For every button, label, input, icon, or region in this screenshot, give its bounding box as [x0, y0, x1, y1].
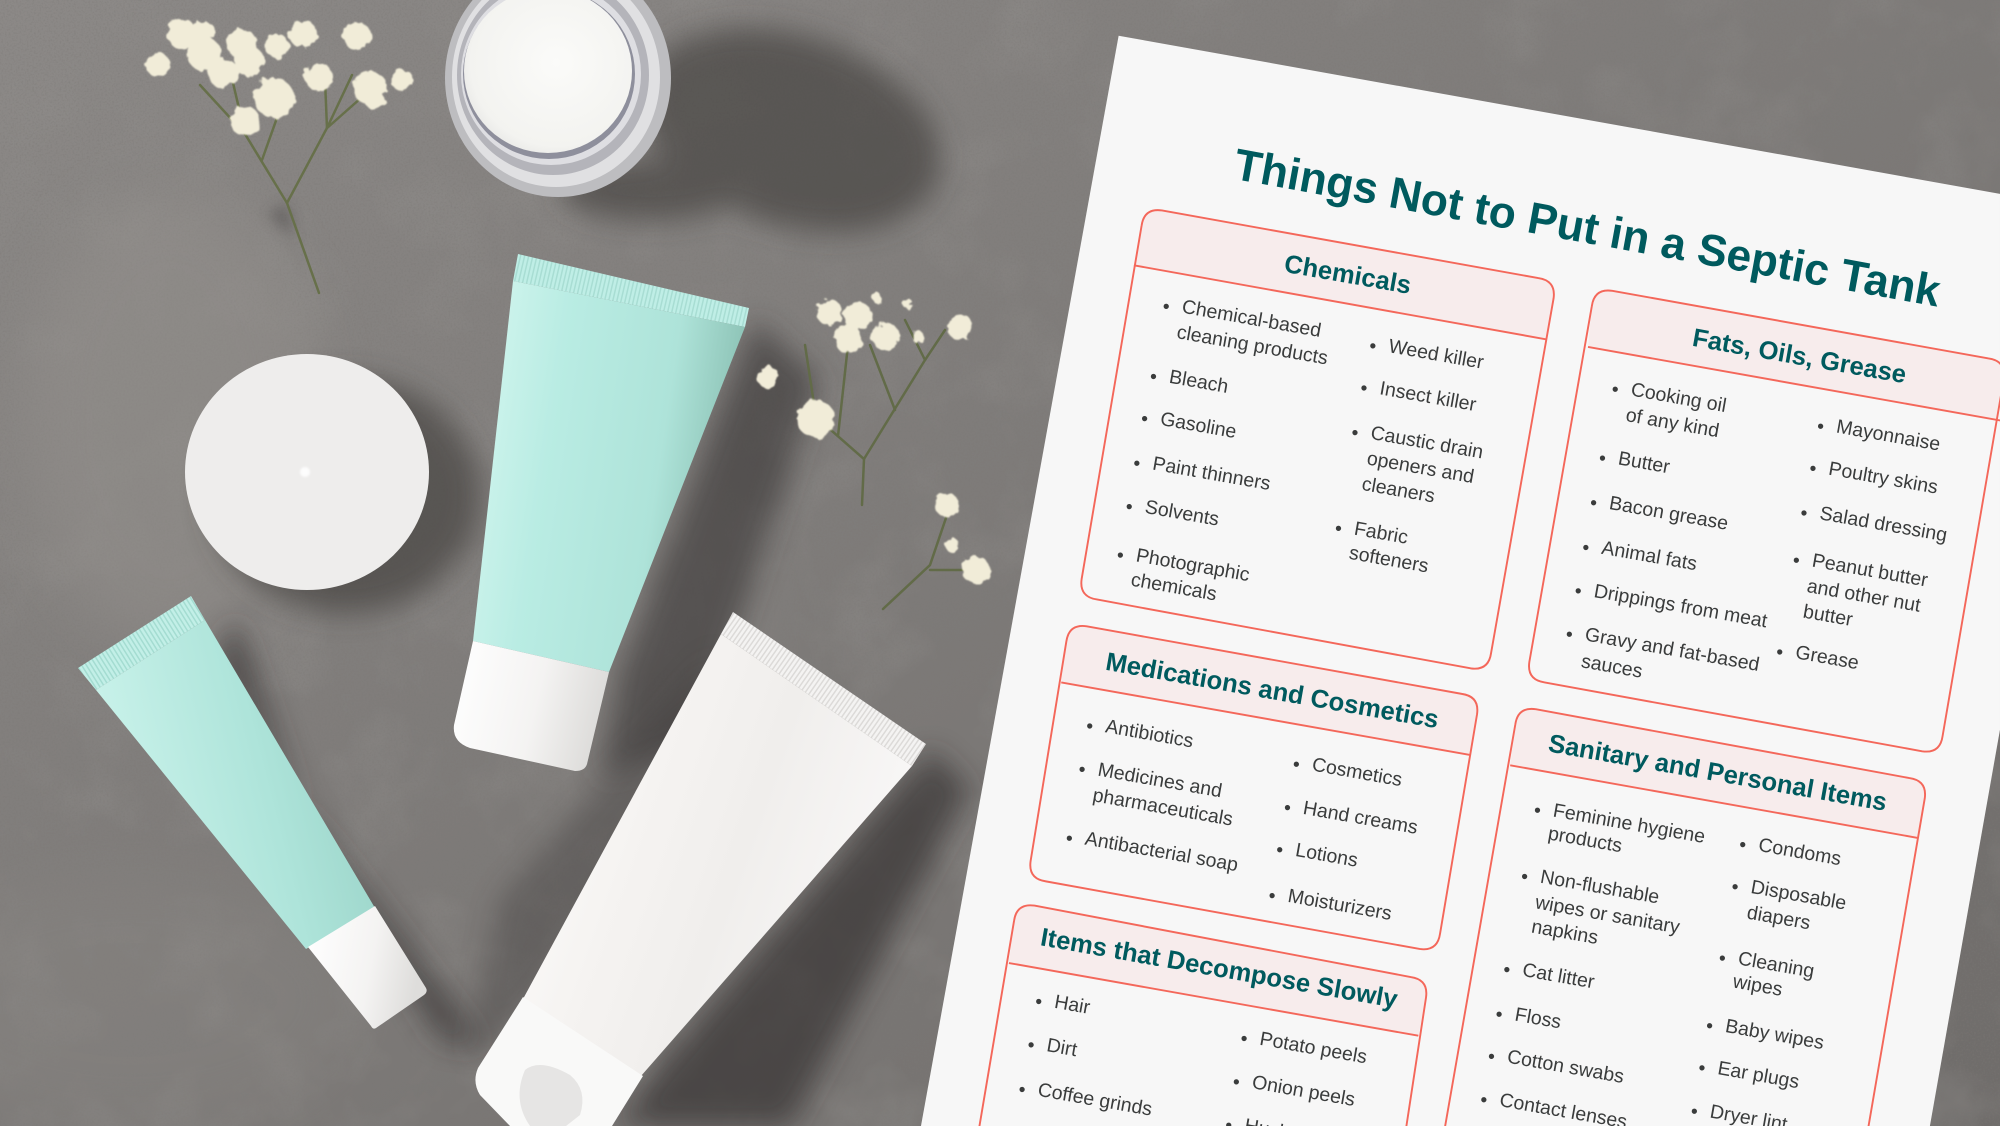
- list: chemicals: softeners: [1347, 542, 1430, 578]
- list: medications and cosmetics: Antibiotics: [1104, 715, 1195, 753]
- list: fats, oils, grease: Drippings from meat: [1592, 580, 1770, 632]
- flower sprig: top left: [146, 19, 413, 293]
- flower sprig: right of tube: [757, 293, 973, 505]
- list: medications and cosmetics: •: [1064, 827, 1075, 850]
- list: items that decompose slowly: •: [1033, 990, 1044, 1013]
- list: items that decompose slowly: •: [1239, 1027, 1249, 1050]
- list: fats, oils, grease: •: [1815, 415, 1826, 438]
- icon: cream jar: [445, 0, 671, 197]
- list: sanitary and personal items: Disposable: [1749, 876, 1848, 915]
- list: chemicals: •: [1115, 544, 1126, 567]
- list: fats, oils, grease: Animal fats: [1600, 537, 1699, 575]
- list: medications and cosmetics: •: [1267, 884, 1278, 907]
- title: Things Not to Put in a Septic Tank: [1230, 140, 1944, 317]
- list: fats, oils, grease: Bacon grease: [1608, 492, 1730, 535]
- list: fats, oils, grease: •: [1588, 491, 1599, 514]
- list: fats, oils, grease: [1564, 375, 1949, 683]
- list: fats, oils, grease: and other nut: [1805, 575, 1923, 617]
- list: chemicals: Photographic: [1134, 544, 1252, 586]
- list: fats, oils, grease: butter: [1801, 601, 1855, 631]
- heading: items that decompose slowly: Items that Decompose Slowly: [1038, 923, 1400, 1014]
- list: fats, oils, grease: Gravy and fat-based: [1583, 624, 1761, 676]
- list: sanitary and personal items: Cotton swabs: [1506, 1046, 1626, 1088]
- list: chemicals: •: [1124, 495, 1135, 518]
- list: sanitary and personal items: Cat litter: [1521, 959, 1597, 993]
- heading: chemicals: Chemicals: [1282, 250, 1413, 300]
- white tube shadow: [620, 750, 970, 1126]
- list: chemicals: cleaners: [1360, 473, 1437, 508]
- list: chemicals: Fabric: [1352, 518, 1410, 549]
- small teal tube shadow: [215, 618, 485, 1047]
- list: sanitary and personal items: products: [1546, 823, 1624, 857]
- list: sanitary and personal items: •: [1697, 1056, 1707, 1079]
- heading: sanitary and personal items: Sanitary and Personal Items: [1546, 730, 1889, 817]
- list: chemicals: cleaning products: [1175, 321, 1330, 370]
- list: fats, oils, grease: Poultry skins: [1827, 458, 1940, 499]
- list: fats, oils, grease: sauces: [1579, 650, 1644, 683]
- icon: white lid: [185, 354, 429, 590]
- list: sanitary and personal items: diapers: [1745, 902, 1812, 934]
- heading: medications and cosmetics: Medications and Cosmetics: [1104, 648, 1441, 734]
- list: chemicals: Chemical-based: [1180, 296, 1323, 342]
- list: medications and cosmetics: Moisturizers: [1286, 885, 1394, 925]
- list: chemicals: •: [1333, 517, 1344, 540]
- list: fats, oils, grease: •: [1573, 579, 1584, 602]
- jar shadow: [560, 0, 967, 268]
- list: sanitary and personal items: Cleaning: [1736, 948, 1816, 983]
- list: fats, oils, grease: Butter: [1616, 448, 1672, 478]
- icon: large teal tube: [454, 254, 749, 771]
- list: fats, oils, grease: •: [1799, 502, 1809, 524]
- list: fats, oils, grease: •: [1610, 378, 1621, 401]
- list: sanitary and personal items: •: [1717, 947, 1728, 970]
- list: sanitary and personal items: Baby wipes: [1724, 1015, 1826, 1054]
- list: fats, oils, grease: •: [1808, 457, 1818, 480]
- list: medications and cosmetics: •: [1274, 838, 1285, 861]
- panel: sanitary and personal items: [1441, 709, 1925, 1126]
- list: medications and cosmetics: [1064, 712, 1420, 928]
- list: chemicals: Gasoline: [1159, 408, 1238, 443]
- panel: fats, oils, grease: [1529, 290, 2000, 752]
- flower sprig: lower: [883, 493, 990, 609]
- list: chemicals: chemicals: [1129, 569, 1219, 605]
- list: chemicals: [1115, 292, 1486, 605]
- list: fats, oils, grease: •: [1597, 447, 1608, 470]
- list: medications and cosmetics: Medicines and: [1096, 759, 1224, 802]
- list: items that decompose slowly: Coffee grinds: [1036, 1079, 1154, 1121]
- list: sanitary and personal items: •: [1689, 1100, 1700, 1123]
- list: sanitary and personal items: •: [1502, 958, 1512, 981]
- icon: small teal tube: [78, 596, 427, 1029]
- large teal tube shadow: [600, 320, 820, 780]
- icon: large white tube: [475, 612, 926, 1126]
- list: fats, oils, grease: Salad dressing: [1818, 502, 1949, 546]
- list: medications and cosmetics: Lotions: [1294, 839, 1360, 872]
- panel: items that decompose slowly: [976, 905, 1426, 1126]
- list: chemicals: •: [1350, 421, 1360, 444]
- list: items that decompose slowly: •: [1017, 1078, 1028, 1101]
- list: chemicals: Caustic drain: [1369, 422, 1485, 463]
- panel: printed sheet: [921, 36, 2000, 1126]
- list: fats, oils, grease: of any kind: [1624, 404, 1721, 442]
- list: sanitary and personal items: •: [1519, 865, 1530, 888]
- list: sanitary and personal items: •: [1738, 833, 1748, 856]
- list: chemicals: Bleach: [1167, 366, 1230, 398]
- list: sanitary and personal items: •: [1494, 1003, 1505, 1026]
- list: chemicals: •: [1368, 334, 1378, 357]
- list: chemicals: Solvents: [1143, 496, 1221, 531]
- list: sanitary and personal items: Non-flushable: [1539, 866, 1661, 908]
- list: chemicals: •: [1161, 295, 1172, 318]
- list: items that decompose slowly: Dirt: [1045, 1034, 1079, 1061]
- list: sanitary and personal items: •: [1704, 1014, 1715, 1037]
- sheet of paper: [921, 36, 2000, 1126]
- list: items that decompose slowly: Hair: [1053, 991, 1092, 1019]
- panel: medications and cosmetics: [1030, 626, 1477, 949]
- list: items that decompose slowly: Onion peels: [1250, 1071, 1357, 1111]
- list: fats, oils, grease: Peanut butter: [1810, 550, 1930, 592]
- list: fats, oils, grease: Cooking oil: [1629, 379, 1728, 417]
- list: chemicals: Weed killer: [1387, 335, 1486, 374]
- list: chemicals: •: [1132, 452, 1142, 475]
- list: sanitary and personal items: Floss: [1513, 1004, 1563, 1033]
- list: fats, oils, grease: Mayonnaise: [1835, 416, 1942, 456]
- list: fats, oils, grease: Grease: [1794, 641, 1861, 674]
- list: medications and cosmetics: Hand creams: [1301, 797, 1420, 839]
- list: sanitary and personal items: [1479, 796, 1848, 1126]
- list: sanitary and personal items: Feminine hygiene: [1551, 800, 1707, 848]
- heading: fats, oils, grease: Fats, Oils, Grease: [1690, 324, 1908, 389]
- list: items that decompose slowly: •: [1231, 1070, 1242, 1093]
- list: chemicals: •: [1359, 377, 1369, 399]
- list: medications and cosmetics: Antibacterial soap: [1083, 828, 1240, 876]
- list: chemicals: •: [1139, 407, 1150, 430]
- list: sanitary and personal items: •: [1532, 799, 1543, 822]
- list: fats, oils, grease: •: [1791, 549, 1802, 572]
- list: chemicals: •: [1148, 365, 1159, 388]
- list: fats, oils, grease: •: [1581, 536, 1591, 559]
- list: items that decompose slowly: [1017, 988, 1369, 1126]
- list: chemicals: openers and: [1365, 448, 1476, 488]
- panel: chemicals: [1081, 210, 1554, 669]
- list: items that decompose slowly: •: [1026, 1033, 1036, 1056]
- list: medications and cosmetics: pharmaceuticals: [1091, 784, 1235, 831]
- list: items that decompose slowly: Potato peels: [1258, 1028, 1369, 1068]
- list: sanitary and personal items: napkins: [1530, 916, 1600, 949]
- list: chemicals: Paint thinners: [1151, 453, 1272, 495]
- list: sanitary and personal items: Condoms: [1757, 834, 1843, 870]
- list: sanitary and personal items: wipes: [1730, 970, 1784, 1001]
- lid shadow: [210, 377, 480, 613]
- list: chemicals: Insect killer: [1378, 377, 1478, 416]
- list: sanitary and personal items: wipes or sanitary: [1533, 891, 1682, 939]
- list: medications and cosmetics: •: [1282, 796, 1293, 819]
- list: sanitary and personal items: Ear plugs: [1716, 1057, 1801, 1093]
- list: medications and cosmetics: •: [1077, 758, 1088, 781]
- list: medications and cosmetics: •: [1291, 753, 1302, 776]
- list: medications and cosmetics: •: [1084, 715, 1095, 737]
- list: fats, oils, grease: •: [1774, 641, 1785, 663]
- list: sanitary and personal items: •: [1730, 875, 1741, 898]
- list: sanitary and personal items: •: [1486, 1045, 1497, 1068]
- list: medications and cosmetics: Cosmetics: [1310, 754, 1404, 791]
- list: sanitary and personal items: •: [1479, 1088, 1489, 1111]
- list: fats, oils, grease: •: [1564, 623, 1575, 646]
